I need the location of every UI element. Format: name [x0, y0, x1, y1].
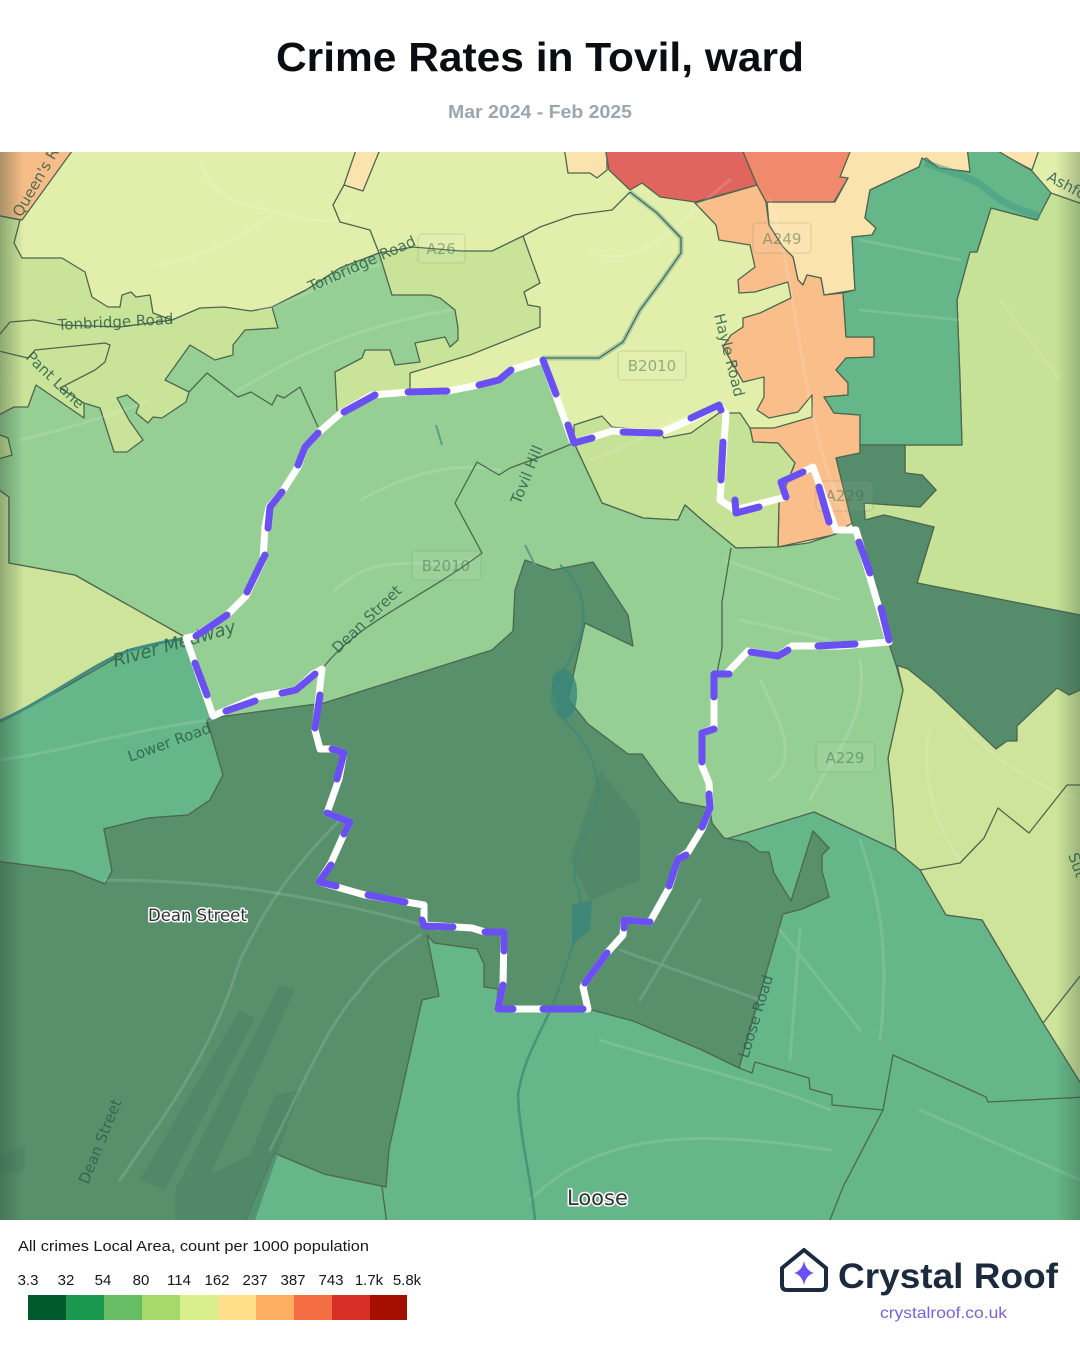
legend scale labels: 1.7k — [355, 1272, 384, 1289]
subtitle: date range: Mar 2024 - Feb 2025 — [448, 102, 632, 122]
region: town centre red — [605, 147, 757, 202]
street labels: Dean Street — [328, 581, 405, 657]
region: south-west riverside moderate area — [0, 487, 185, 725]
legend scale labels: 237 — [242, 1272, 268, 1289]
road shield: B2010 west: B2010 — [422, 557, 470, 575]
legend colour bar — [28, 1295, 407, 1320]
road shield: A229 south — [816, 742, 875, 772]
region: town centre orange-red — [741, 147, 852, 202]
ward outline: white — [186, 360, 889, 1009]
place label: Loose: Loose — [567, 1186, 628, 1210]
legend scale labels — [18, 1272, 422, 1289]
brand url: crystalroof.co.uk — [880, 1305, 1008, 1322]
legend scale labels: 54 — [95, 1272, 111, 1289]
road shield: A26 — [418, 234, 465, 263]
title: Crime Rates in Tovil, ward — [276, 34, 804, 80]
region: Tonbridge Road moderate area — [0, 215, 540, 480]
river: Medway north loop — [543, 192, 681, 358]
road network — [0, 162, 1080, 1200]
legend scale labels: 162 — [204, 1272, 230, 1289]
street labels: Tonbridge Road — [304, 232, 418, 296]
ward outline: purple dashes — [195, 360, 889, 1009]
map edge shading — [0, 152, 1080, 1220]
legend scale labels: 3.3 — [18, 1272, 38, 1289]
river: Medway — [0, 638, 190, 723]
darker woodland patches — [246, 1152, 278, 1220]
region: moderate pocket south of B2010 — [574, 413, 795, 548]
region: southern low-crime green — [240, 812, 1080, 1225]
legend scale labels: 32 — [58, 1272, 74, 1289]
region: south-east moderate area — [888, 660, 1080, 1095]
legend title: All crimes Local Area, count per 1000 population — [18, 1238, 369, 1255]
legend scale labels: 80 — [133, 1272, 149, 1289]
legend scale labels: 5.8k — [393, 1272, 422, 1289]
road shield: A26: A26 — [426, 240, 456, 258]
region: east moderate area — [864, 193, 1080, 616]
street labels: Lower Road — [125, 719, 213, 766]
ward boundary: Tovil — [186, 360, 889, 1009]
icon: house with star — [782, 1250, 826, 1290]
street labels: Queen's Road — [9, 121, 76, 220]
region: Tovil light green — [0, 253, 903, 852]
region: east dark green — [836, 445, 1080, 749]
region: town centre peach blocks — [344, 147, 1040, 295]
street labels: Tonbridge Road — [56, 310, 174, 334]
street labels: Loose Road — [735, 973, 777, 1060]
street labels: Pant Lane — [22, 348, 88, 412]
legend scale labels: 114 — [167, 1272, 191, 1289]
region: Dean Street and Tovil dark green — [0, 560, 829, 1225]
street labels: Hayle Road — [710, 312, 748, 399]
legend scale labels: 387 — [280, 1272, 306, 1289]
top-right river tint — [925, 163, 1040, 216]
region: north-west corner high crime — [0, 147, 75, 220]
street labels: River Medway — [111, 617, 239, 672]
road shield: A229 north: A229 — [826, 487, 864, 505]
road shield: A229 north — [816, 481, 873, 511]
street labels: Dean Street — [75, 1096, 125, 1186]
street labels: Tovil Hill — [507, 443, 547, 507]
logo: Crystal Roof — [782, 1250, 1058, 1322]
region: east low-crime green — [824, 147, 1051, 445]
road shield: A249: A249 — [763, 230, 801, 248]
road shield: B2010 west — [412, 551, 481, 580]
brand name: Crystal Roof — [838, 1257, 1058, 1296]
road shield: B2010 north: B2010 — [628, 357, 676, 375]
road shield: A249 — [753, 223, 811, 253]
region: River Medway south bank green — [0, 637, 223, 884]
legend — [18, 1238, 422, 1320]
river: Loose stream and pools — [436, 425, 598, 1220]
internal boundaries — [0, 185, 1080, 1225]
road shield: A229 south: A229 — [826, 749, 864, 767]
legend scale labels: 743 — [318, 1272, 344, 1289]
place label: Dean Street: Dean Street — [148, 906, 247, 925]
road shield: B2010 north — [618, 351, 686, 380]
region: town centre orange — [695, 185, 874, 547]
street labels — [9, 121, 1080, 1186]
